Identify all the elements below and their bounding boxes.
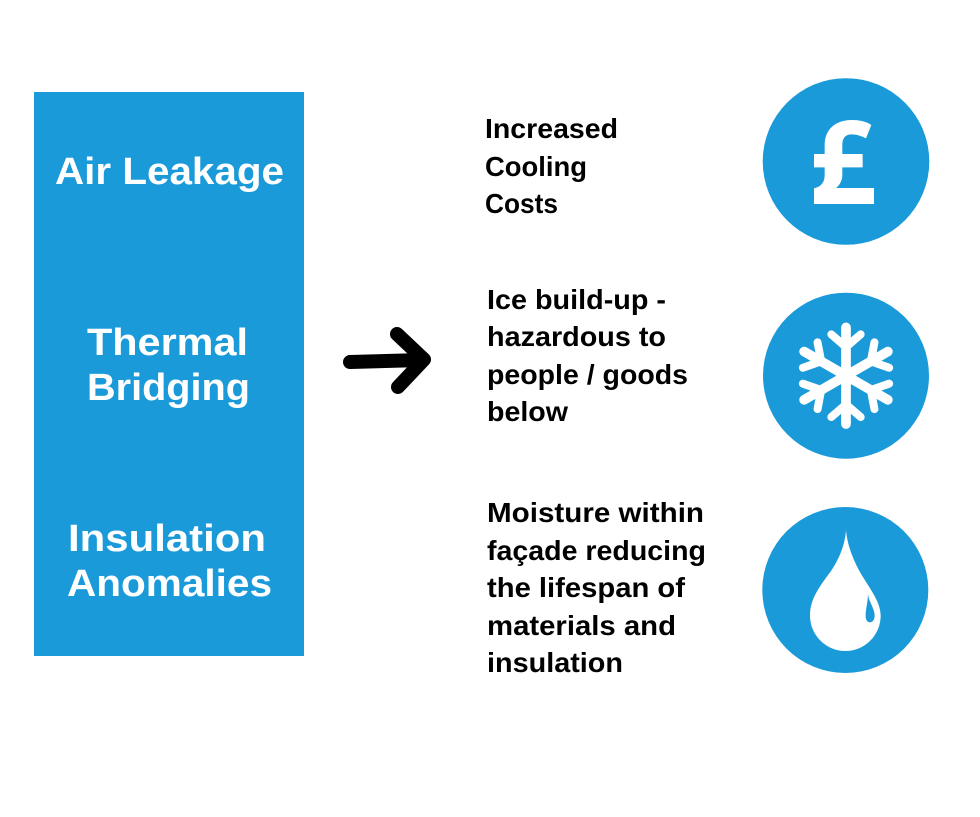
text: moisture within facade: the lifespan of	[487, 572, 686, 603]
text: ice build-up: hazardous to	[487, 321, 666, 352]
text: ice build-up: Ice build-up -	[487, 284, 666, 315]
text: ice build-up: below	[487, 396, 568, 427]
text: moisture within facade: materials and	[487, 610, 676, 641]
text: moisture within facade: insulation	[487, 647, 623, 678]
text: increased cooling costs: Increased	[485, 113, 618, 144]
text: moisture within facade: Moisture within	[487, 497, 704, 528]
arrow	[350, 334, 424, 387]
icon: snowflake	[763, 293, 929, 459]
heading: Air Leakage: Air Leakage	[55, 151, 284, 193]
text: ice build-up: people / goods	[487, 359, 688, 390]
panel: causes	[34, 92, 304, 656]
heading: Thermal Bridging: Thermal	[87, 322, 248, 364]
icon: water drop	[762, 507, 928, 673]
heading: Thermal Bridging: Bridging	[87, 367, 250, 409]
text: ice build-up	[487, 284, 688, 427]
heading: Thermal Bridging	[87, 322, 250, 409]
text: increased cooling costs: Cooling	[485, 151, 587, 182]
text: increased cooling costs	[485, 113, 618, 219]
icon: pound sign	[763, 78, 929, 245]
text: increased cooling costs: Costs	[485, 188, 558, 219]
heading: Insulation Anomalies: Insulation	[68, 518, 266, 560]
text: moisture within facade: façade reducing	[487, 535, 706, 566]
text: moisture within facade	[487, 497, 706, 678]
heading: Insulation Anomalies	[67, 518, 272, 605]
heading: Insulation Anomalies: Anomalies	[67, 563, 272, 605]
